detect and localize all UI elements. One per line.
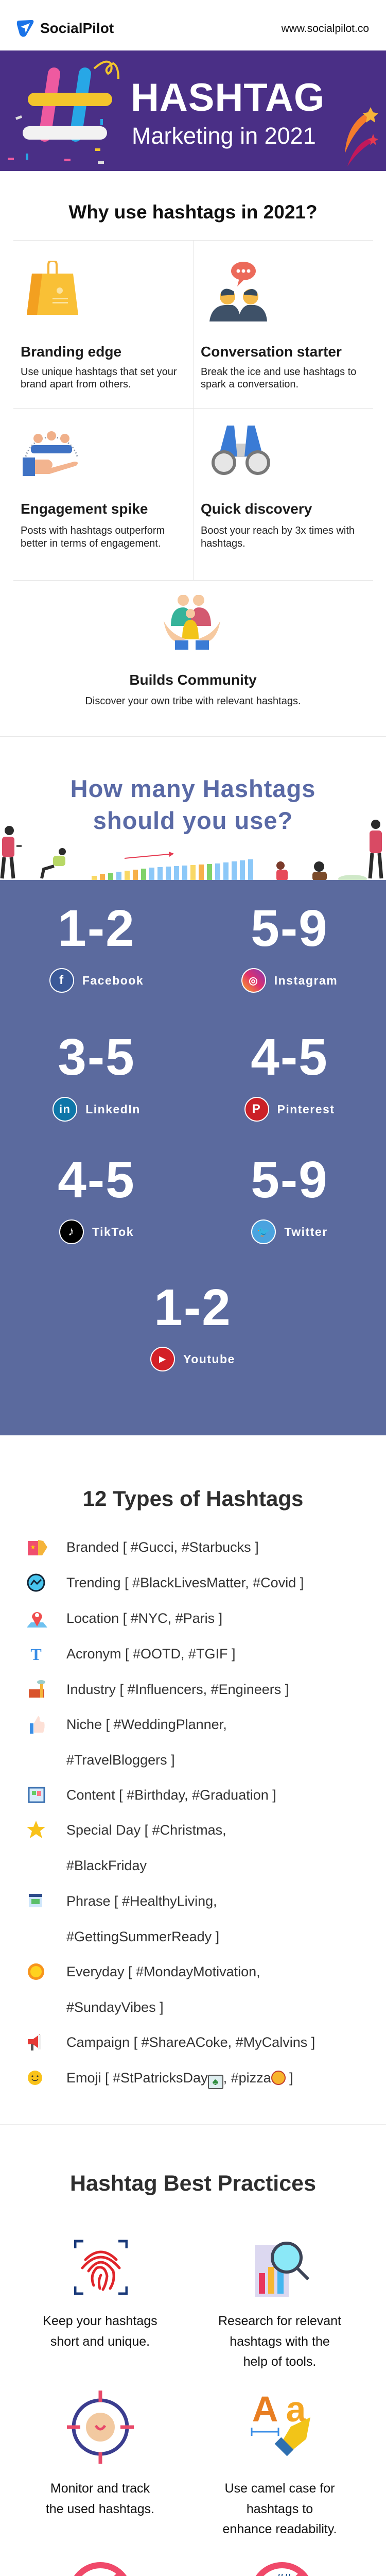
item: niche xyxy=(30,1716,227,1768)
stat: twitter: 5-9 xyxy=(251,1151,328,1209)
item: everyday: Everyday [ #MondayMotivation, xyxy=(66,1964,260,1979)
icon: hashtag xyxy=(8,61,119,164)
stat: tiktok xyxy=(58,1151,135,1244)
stat: linkedin: 3-5 xyxy=(58,1028,135,1086)
item: acronym xyxy=(30,1645,236,1664)
icon: person sitting xyxy=(40,848,66,879)
text: camel case xyxy=(183,2479,376,2540)
stat: facebook: Facebook xyxy=(82,974,144,987)
icon: Aa pen xyxy=(250,2391,314,2458)
stat: linkedin xyxy=(52,1028,141,1122)
cell: conversation starter: Conversation starter xyxy=(201,344,342,360)
heading: 12 types: 12 Types of Hashtags xyxy=(83,1486,303,1511)
item: everyday: #SundayVibes ] xyxy=(66,1999,164,2015)
cell: engagement spike: Posts with hashtags outperform better in terms of engagement. xyxy=(21,525,165,549)
text: keep short: Keep your hashtags xyxy=(43,2314,157,2328)
text: keep short: short and unique. xyxy=(50,2334,150,2348)
icon: family in hands xyxy=(164,595,220,650)
item: everyday xyxy=(28,1963,260,2015)
subtitle: Marketing in 2021 xyxy=(132,123,316,149)
icon: people on hand xyxy=(23,431,78,476)
stat: twitter: Twitter xyxy=(284,1225,328,1239)
stat: pinterest: Pinterest xyxy=(277,1103,335,1116)
stat: pinterest: P xyxy=(252,1102,261,1116)
icon: shooting stars xyxy=(345,107,378,166)
text: camel case: hashtags to xyxy=(247,2502,313,2516)
item: branded: Branded [ #Gucci, #Starbucks ] xyxy=(66,1539,259,1555)
list: hashtag types xyxy=(27,1539,315,2089)
icon: two people talking xyxy=(209,262,267,321)
text: research: Research for relevant xyxy=(218,2314,341,2328)
cell: branding edge: Branding edge xyxy=(21,344,121,360)
item: campaign: Campaign [ #ShareACoke, #MyCalvins ] xyxy=(66,2035,315,2050)
stat: youtube xyxy=(150,1279,235,1371)
text: monitor xyxy=(4,2479,197,2519)
icon: socialpilot logo xyxy=(16,20,34,37)
icon: no hashes xyxy=(250,2562,314,2576)
heading: why use hashtags: Why use hashtags in 2021? xyxy=(68,201,318,223)
stat: instagram: Instagram xyxy=(274,974,338,987)
icon: no space xyxy=(68,2562,133,2576)
item: phrase xyxy=(29,1893,219,1944)
stat: youtube: 1-2 xyxy=(154,1279,232,1336)
stat: tiktok: TikTok xyxy=(92,1225,134,1239)
stat: instagram xyxy=(241,900,338,993)
heading: how many hashtags xyxy=(71,775,315,834)
cell: conversation starter xyxy=(201,262,356,390)
item: trending: Trending [ #BlackLivesMatter, #Covid ] xyxy=(66,1575,304,1590)
item: acronym: T xyxy=(30,1645,42,1664)
banner xyxy=(0,50,386,171)
cell: branding edge xyxy=(21,261,177,390)
panel: why grid xyxy=(13,240,373,581)
chart: decorative bars xyxy=(92,852,253,880)
item: emoji: ♣ xyxy=(213,2077,218,2087)
item: emoji: Emoji [ #StPatricksDay , #pizza ] xyxy=(66,2070,293,2086)
item: location: Location [ #NYC, #Paris ] xyxy=(66,1611,222,1626)
panel: hashtag counts xyxy=(0,880,386,1435)
stat: facebook: 1-2 xyxy=(58,900,135,957)
text: research: hashtags with the xyxy=(230,2334,330,2348)
cell: engagement spike xyxy=(21,431,165,549)
item: niche: Niche [ #WeddingPlanner, xyxy=(66,1717,227,1732)
item: branded: ★ xyxy=(30,1544,36,1551)
stat: facebook xyxy=(49,900,144,993)
item: phrase: #GettingSummerReady ] xyxy=(66,1929,219,1944)
cell: quick discovery xyxy=(201,426,355,549)
heading: how many hashtags: How many Hashtags xyxy=(71,775,315,802)
icon: target xyxy=(67,2391,134,2464)
panel: how many hashtags header xyxy=(0,736,386,880)
item: phrase: Phrase [ #HealthyLiving, xyxy=(66,1893,217,1909)
icon: person standing left xyxy=(0,826,22,879)
text: monitor: Monitor and track xyxy=(50,2481,150,2496)
text: research xyxy=(183,2311,376,2372)
stat: youtube: ▶ xyxy=(159,1355,166,1364)
stat: tiktok: ♪ xyxy=(68,1225,75,1239)
item: acronym: Acronym [ #OOTD, #TGIF ] xyxy=(66,1646,236,1662)
cell: engagement spike: Engagement spike xyxy=(21,501,148,517)
stat: linkedin: in xyxy=(59,1103,71,1115)
icon: shopping bag xyxy=(27,261,78,315)
header url: www.socialpilot.co xyxy=(282,23,369,35)
heading: how many hashtags: should you use? xyxy=(93,807,293,834)
stat: twitter xyxy=(251,1151,328,1244)
icon: fingerprint xyxy=(74,2239,128,2296)
item: special day: #BlackFriday xyxy=(66,1858,147,1873)
item: niche: #TravelBloggers ] xyxy=(66,1752,175,1768)
stat: pinterest xyxy=(244,1028,335,1122)
panel: builds community: Builds Community xyxy=(129,672,257,688)
text: camel case: enhance readability. xyxy=(223,2522,337,2536)
item: content: Content [ #Birthday, #Graduation ] xyxy=(66,1787,276,1803)
icon: binoculars xyxy=(212,426,270,475)
item: special day xyxy=(27,1821,226,1873)
text: keep short xyxy=(4,2311,197,2352)
stat: facebook: f xyxy=(59,973,64,987)
cell: quick discovery: Quick discovery xyxy=(201,501,312,517)
cell: quick discovery: Boost your reach by 3x times with hashtags. xyxy=(201,525,355,549)
stat: youtube: Youtube xyxy=(183,1352,235,1365)
panel: builds community: Discover your own tribe with relevant hashtags. xyxy=(85,696,301,707)
stat: linkedin: LinkedIn xyxy=(85,1103,141,1116)
cell: conversation starter: Break the ice and use hashtags to spark a conversation. xyxy=(201,366,356,390)
item: emoji xyxy=(28,2070,293,2089)
text: camel case: Use camel case for xyxy=(225,2481,335,2496)
stat: twitter: 🐦 xyxy=(257,1226,271,1238)
icon: research magnifier xyxy=(255,2239,311,2297)
panel: builds community xyxy=(85,595,301,707)
stat: instagram: ◎ xyxy=(249,975,258,986)
panel: best practices icons xyxy=(0,2231,386,2576)
heading: best practices: Hashtag Best Practices xyxy=(70,2171,316,2196)
text: research: help of tools. xyxy=(243,2354,316,2369)
title: HASHTAG: HASHTAG xyxy=(131,76,325,120)
stat: instagram: 5-9 xyxy=(251,900,328,957)
stat: tiktok: 4-5 xyxy=(58,1151,135,1209)
icon: people right xyxy=(276,820,383,880)
stat: pinterest: 4-5 xyxy=(251,1028,328,1086)
item: industry: Industry [ #Influencers, #Engineers ] xyxy=(66,1682,289,1697)
text: monitor: the used hashtags. xyxy=(46,2502,154,2516)
item: special day: Special Day [ #Christmas, xyxy=(66,1822,226,1838)
header logo: SocialPilot xyxy=(40,20,114,36)
cell: branding edge: Use unique hashtags that set your brand apart from others. xyxy=(21,366,177,390)
